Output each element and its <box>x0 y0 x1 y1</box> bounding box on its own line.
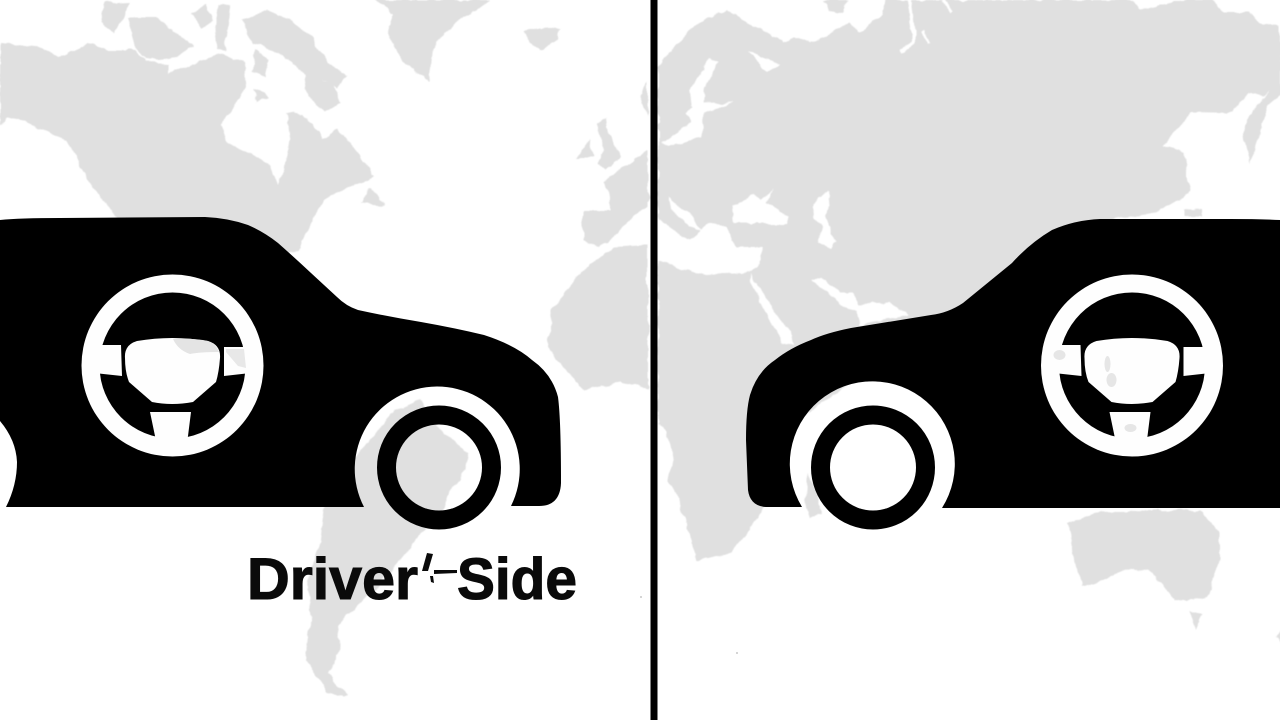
Tasmania <box>1190 612 1202 630</box>
Iceland <box>522 28 560 50</box>
center divider <box>650 0 658 720</box>
Norway edge <box>640 80 648 115</box>
North America <box>0 43 375 260</box>
British Isles <box>577 117 621 170</box>
Japan fragment <box>1184 208 1202 217</box>
Australia <box>1068 510 1220 602</box>
caption: Driver's Side: Side <box>457 547 577 612</box>
New Zealand edge <box>1275 630 1280 643</box>
right car wheel <box>820 415 926 520</box>
world map: left panel (Americas) <box>0 0 648 697</box>
right car silhouette <box>746 219 1280 508</box>
specks <box>640 596 738 654</box>
Novaya Zemlya <box>823 0 847 13</box>
Eurasia and Africa <box>658 0 1280 560</box>
caption: Driver's Side <box>247 547 577 612</box>
Greenland <box>375 0 492 82</box>
right steering wheel <box>1041 274 1223 456</box>
Madagascar <box>805 472 823 517</box>
Arctic islands <box>101 2 347 110</box>
left car wheel <box>386 415 492 520</box>
garbled apostrophe marks <box>422 553 457 583</box>
inland seas <box>658 0 951 347</box>
world map: right panel (Eurasia, Africa, Australia) <box>658 0 1280 643</box>
Great Lakes <box>322 192 354 227</box>
Newfoundland <box>362 187 385 205</box>
left steering wheel <box>82 274 264 456</box>
Western Europe <box>583 150 648 247</box>
South America <box>305 400 469 697</box>
caption: Driver's Side: Driver <box>247 547 418 612</box>
West Africa <box>549 245 648 390</box>
left car silhouette <box>0 217 561 507</box>
